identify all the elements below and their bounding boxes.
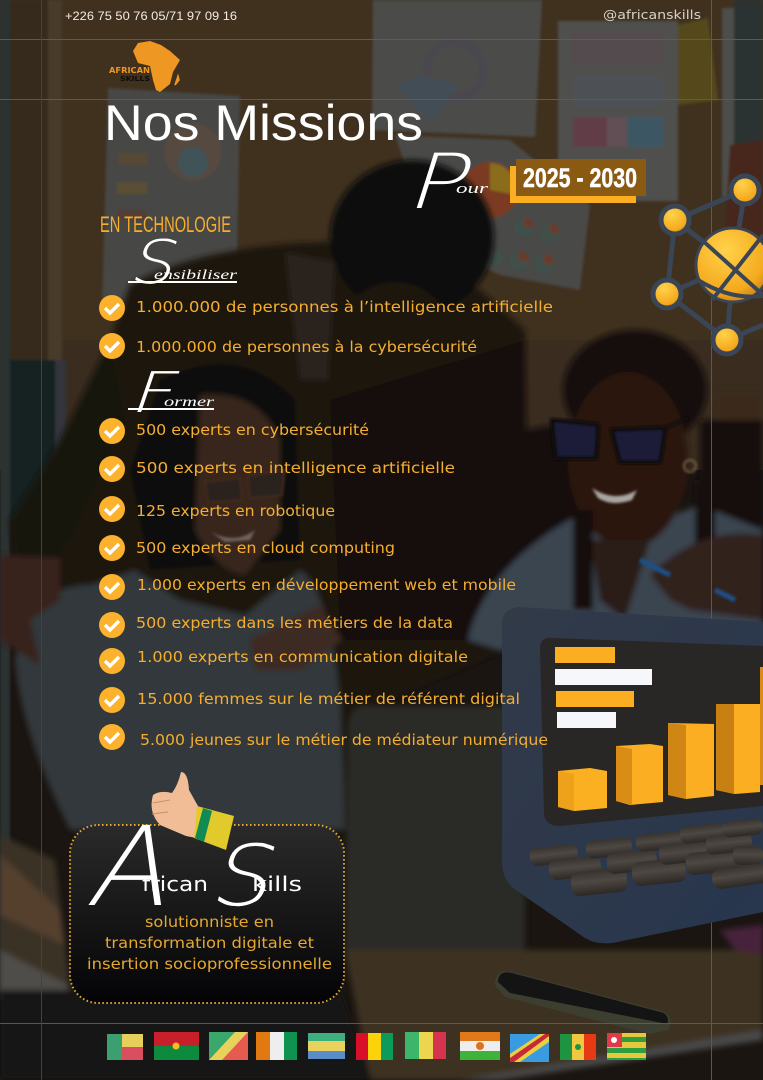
laptop behind [345, 706, 525, 950]
phone [495, 971, 670, 1034]
heading: Former: F [128, 361, 180, 426]
flag: Mali [405, 1032, 446, 1059]
flag: Senegal [560, 1034, 596, 1060]
item cybersecurite: 500 experts en cybersécurité [136, 421, 369, 439]
subtitle: Pour [405, 137, 488, 226]
man [50, 242, 528, 720]
illustration: 3D laptop with bar chart [502, 607, 763, 943]
laptop frame and base [502, 607, 763, 943]
item 2 [99, 333, 477, 359]
item communication: 1.000 experts en communication digitale [137, 648, 468, 666]
item intelligence artificielle: 500 experts en intelligence artificielle [136, 459, 455, 477]
tagline [87, 913, 332, 973]
icon: 3D molecule [653, 176, 763, 354]
social handle: @africanskills [603, 8, 701, 22]
date badge [510, 159, 646, 203]
phone number: +226 75 50 76 05/71 97 09 16 [65, 9, 237, 23]
tagline: solutionniste en [145, 913, 274, 931]
list: former [99, 418, 548, 750]
vertical 3D bars [558, 667, 763, 811]
subtitle: Pour: P [405, 137, 473, 226]
heading: Sensibiliser [128, 228, 238, 298]
papers left [0, 835, 70, 990]
item femmes: 15.000 femmes sur le métier de référent digital [137, 690, 520, 708]
list: sensibiliser [99, 295, 553, 359]
item jeunes [99, 724, 548, 750]
logo: African Skills [109, 41, 180, 92]
flag: Burkina Faso [154, 1032, 199, 1060]
brand name [85, 803, 302, 931]
item femmes [99, 687, 520, 713]
tagline: insertion socioprofessionnelle [87, 955, 332, 973]
faces details [205, 470, 285, 502]
flags row [107, 1032, 646, 1062]
heading: Former: ormer [164, 395, 215, 410]
item jeunes: 5.000 jeunes sur le métier de médiateur numérique [140, 731, 548, 749]
item communication [99, 648, 468, 674]
subtitle: Pour: our [456, 181, 488, 197]
woman right [465, 420, 590, 600]
item cloud: 500 experts en cloud computing [136, 539, 395, 557]
date badge: 2025 - 2030 [523, 163, 637, 193]
item robotique: 125 experts en robotique [136, 502, 335, 520]
item 2: 1.000.000 de personnes à la cybersécurité [136, 338, 477, 356]
flag: Benin [107, 1034, 143, 1060]
item web mobile: 1.000 experts en développement web et mobile [137, 576, 516, 594]
brand name: S [208, 827, 276, 925]
flag: Congo [209, 1032, 248, 1060]
title: Nos Missions [104, 95, 423, 151]
flag: Togo [607, 1033, 646, 1060]
flag: Niger [460, 1032, 500, 1060]
logo: African Skills: SKILLS [120, 75, 150, 83]
screen [540, 638, 763, 826]
logo: African Skills: AFRICAN [109, 66, 150, 75]
callout: African Skills [70, 803, 344, 1003]
woman left [130, 364, 300, 570]
flag: DR Congo [510, 1034, 549, 1062]
heading: en technologie: EN TECHNOLOGIE [100, 212, 231, 237]
tagline: transformation digitale et [105, 934, 314, 952]
item 1: 1.000.000 de personnes à l’intelligence artificielle [136, 298, 553, 316]
item web mobile [99, 574, 516, 600]
heading: Sensibiliser: S [128, 228, 178, 298]
item data [99, 612, 453, 638]
heading: Former [128, 361, 215, 426]
flag: Guinea [356, 1033, 393, 1060]
desk [345, 950, 763, 1080]
flag: Ivory Coast [256, 1032, 297, 1060]
item cybersecurite [99, 418, 369, 444]
item data: 500 experts dans les métiers de la data [136, 614, 453, 632]
brand name: frican [142, 872, 208, 896]
flag: Gabon [308, 1033, 345, 1059]
item intelligence artificielle [99, 456, 455, 482]
brand name: A [85, 803, 165, 931]
heading: Sensibiliser: ensibiliser [154, 268, 238, 283]
item robotique [99, 496, 335, 522]
keyboard [529, 818, 763, 897]
icon: thumbs up with bracelet [152, 772, 234, 850]
item cloud [99, 535, 395, 561]
horizontal bars [555, 647, 652, 728]
item 1 [99, 295, 553, 321]
brand name: kills [252, 872, 302, 896]
